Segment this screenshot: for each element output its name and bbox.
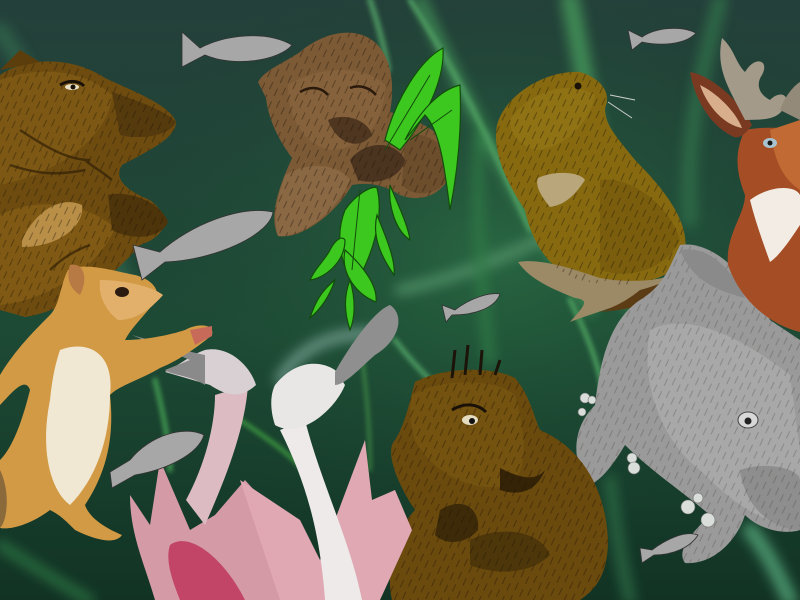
wings: left bird <box>130 460 300 600</box>
neck: left bird <box>186 385 248 525</box>
wing patch: left bird <box>168 541 245 600</box>
fish: lower left <box>110 431 204 488</box>
fish: top centre <box>182 32 292 67</box>
fish: centre left <box>133 211 273 280</box>
animal: chipmunk <box>0 265 212 540</box>
head: right bird <box>271 364 345 429</box>
animal: manatee <box>576 244 800 563</box>
fish: top right <box>628 28 696 50</box>
animal: left beaver <box>0 50 176 317</box>
head: left bird <box>165 349 256 394</box>
wings: right bird <box>240 440 412 600</box>
beak: right bird <box>335 305 398 385</box>
fish: lower right <box>640 534 698 563</box>
animal: pink birds <box>130 305 412 600</box>
animal: bottom beaver <box>390 345 608 600</box>
bubbles <box>578 393 715 527</box>
neck: right bird <box>280 420 362 600</box>
animal: centre beaver holding plant <box>258 33 452 236</box>
fish group <box>110 28 698 563</box>
fish: small centre <box>442 294 500 322</box>
plant: green leaves <box>310 48 461 330</box>
animal: muskrat upper right <box>496 72 686 322</box>
animal: deer <box>690 38 800 332</box>
beak: left bird <box>132 335 205 385</box>
